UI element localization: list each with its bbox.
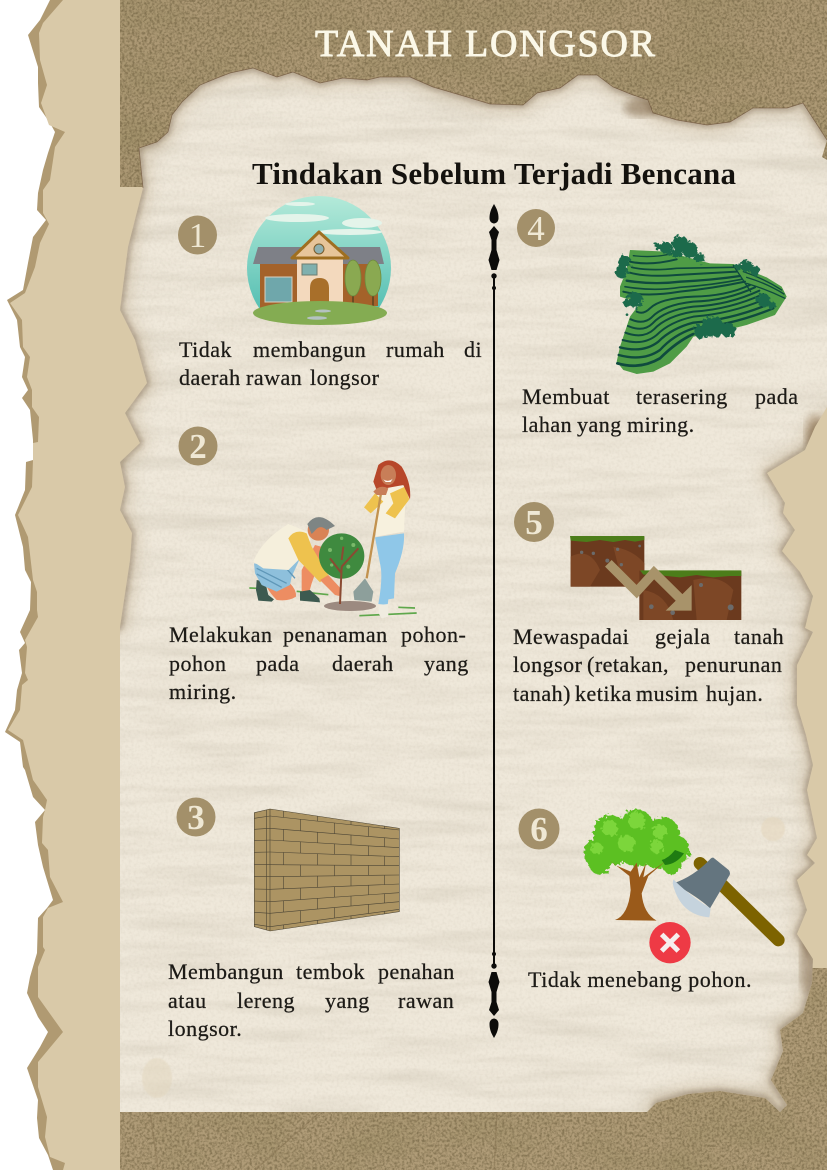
- number badge 1: 1: [189, 216, 206, 255]
- text: item 3: penahan: [378, 959, 455, 984]
- icon: two people planting a tree: [249, 460, 417, 618]
- number badge 5: [514, 502, 554, 542]
- title: TANAH LONGSOR: [315, 23, 656, 65]
- text: item 2: pada: [256, 651, 300, 676]
- text: item 1: rumah: [386, 337, 445, 362]
- text: item 3: lereng: [237, 988, 295, 1013]
- text: item 3: atau: [168, 988, 207, 1013]
- tree: [319, 533, 364, 579]
- number badge 4: 4: [527, 209, 545, 248]
- text: item 6: Tidak menebang pohon.: [528, 967, 752, 992]
- text: item 5: longsor: [513, 652, 583, 677]
- text: item 4: Membuat: [522, 384, 610, 409]
- number badge 2: [178, 426, 218, 466]
- divider: ornamental vertical spine: [488, 204, 500, 1038]
- text: item 5: tanah: [734, 624, 784, 649]
- panel: item 4 terracing: [517, 209, 799, 437]
- text: item 5: hujan.: [706, 681, 763, 706]
- text: item 5: tanah): [513, 681, 571, 706]
- text: item 4: terasering: [636, 384, 728, 409]
- text: item 2: Melakukan: [169, 622, 272, 647]
- text: item 2: penanaman: [283, 622, 388, 647]
- axe: [673, 858, 778, 940]
- text: item 2: yang: [424, 651, 469, 676]
- text: item 2: pohon: [169, 651, 226, 676]
- number badge 6: [518, 808, 560, 850]
- icon: house illustration: [247, 196, 391, 325]
- text: item 3: longsor.: [168, 1016, 242, 1041]
- number badge 2: 2: [189, 427, 207, 466]
- panel: item 6 do not cut down trees: [518, 808, 778, 992]
- text: item 2: daerah: [332, 651, 394, 676]
- text: item 2: pohon-: [401, 622, 466, 647]
- number badge 3: 3: [187, 798, 205, 837]
- text: item 3: tembok: [296, 959, 365, 984]
- number badge 6: 6: [530, 810, 548, 849]
- panel: cardboard bottom band: [120, 968, 827, 1170]
- man: [256, 580, 274, 602]
- icon: stepped soil blocks with falling arrow: [570, 536, 741, 620]
- text: item 1: Tidak: [179, 337, 232, 362]
- text: item 3: rawan: [398, 988, 454, 1013]
- tree: [584, 809, 690, 921]
- text: item 5: musim: [636, 681, 698, 706]
- text: item 1: longsor: [310, 365, 380, 390]
- text: item 1: rawan: [246, 365, 302, 390]
- text: item 1: membangun: [253, 337, 366, 362]
- panel: item 1 do not build houses in landslide areas: [178, 196, 482, 390]
- number badge 3: [176, 798, 216, 837]
- heading: Tindakan Sebelum Terjadi Bencana: [252, 156, 736, 191]
- panel: beige backing behind the paper: [120, 186, 827, 970]
- icon: tree with axe and prohibition mark: [584, 809, 778, 963]
- number badge 4: [517, 209, 555, 248]
- panel: torn beige paper strip on the left: [5, 0, 125, 1170]
- text: item 4: pada: [755, 384, 799, 409]
- panel: item 5 watch for signs of landslide: [513, 502, 784, 706]
- text: item 5: gejala: [655, 624, 711, 649]
- text: item 5: Mewaspadai: [513, 624, 629, 649]
- icon: green rice terraces: [615, 235, 787, 374]
- number badge 5: 5: [525, 503, 543, 542]
- icon: brick retaining wall: [254, 809, 399, 931]
- text: item 4: miring.: [627, 412, 695, 437]
- woman: [375, 533, 404, 605]
- number badge 1: [178, 216, 217, 255]
- text: item 4: yang: [577, 412, 622, 437]
- text: item 3: Membangun: [168, 959, 284, 984]
- text: item 5: ketika: [575, 681, 632, 706]
- text: item 5: penurunan: [685, 652, 782, 677]
- text: item 4: lahan: [522, 412, 572, 437]
- panel: cardboard top band: [120, 0, 827, 187]
- panel: item 3 retaining wall: [168, 798, 455, 1041]
- text: item 2: miring.: [169, 679, 237, 704]
- prohibition mark: [649, 922, 691, 963]
- panel: aged parchment sheet: [120, 68, 827, 1112]
- text: item 5: (retakan,: [587, 652, 669, 677]
- panel: item 2 planting trees on slopes: [169, 426, 469, 704]
- text: item 3: yang: [325, 988, 370, 1013]
- text: item 1: daerah: [179, 365, 241, 390]
- text: item 1: di: [464, 337, 482, 362]
